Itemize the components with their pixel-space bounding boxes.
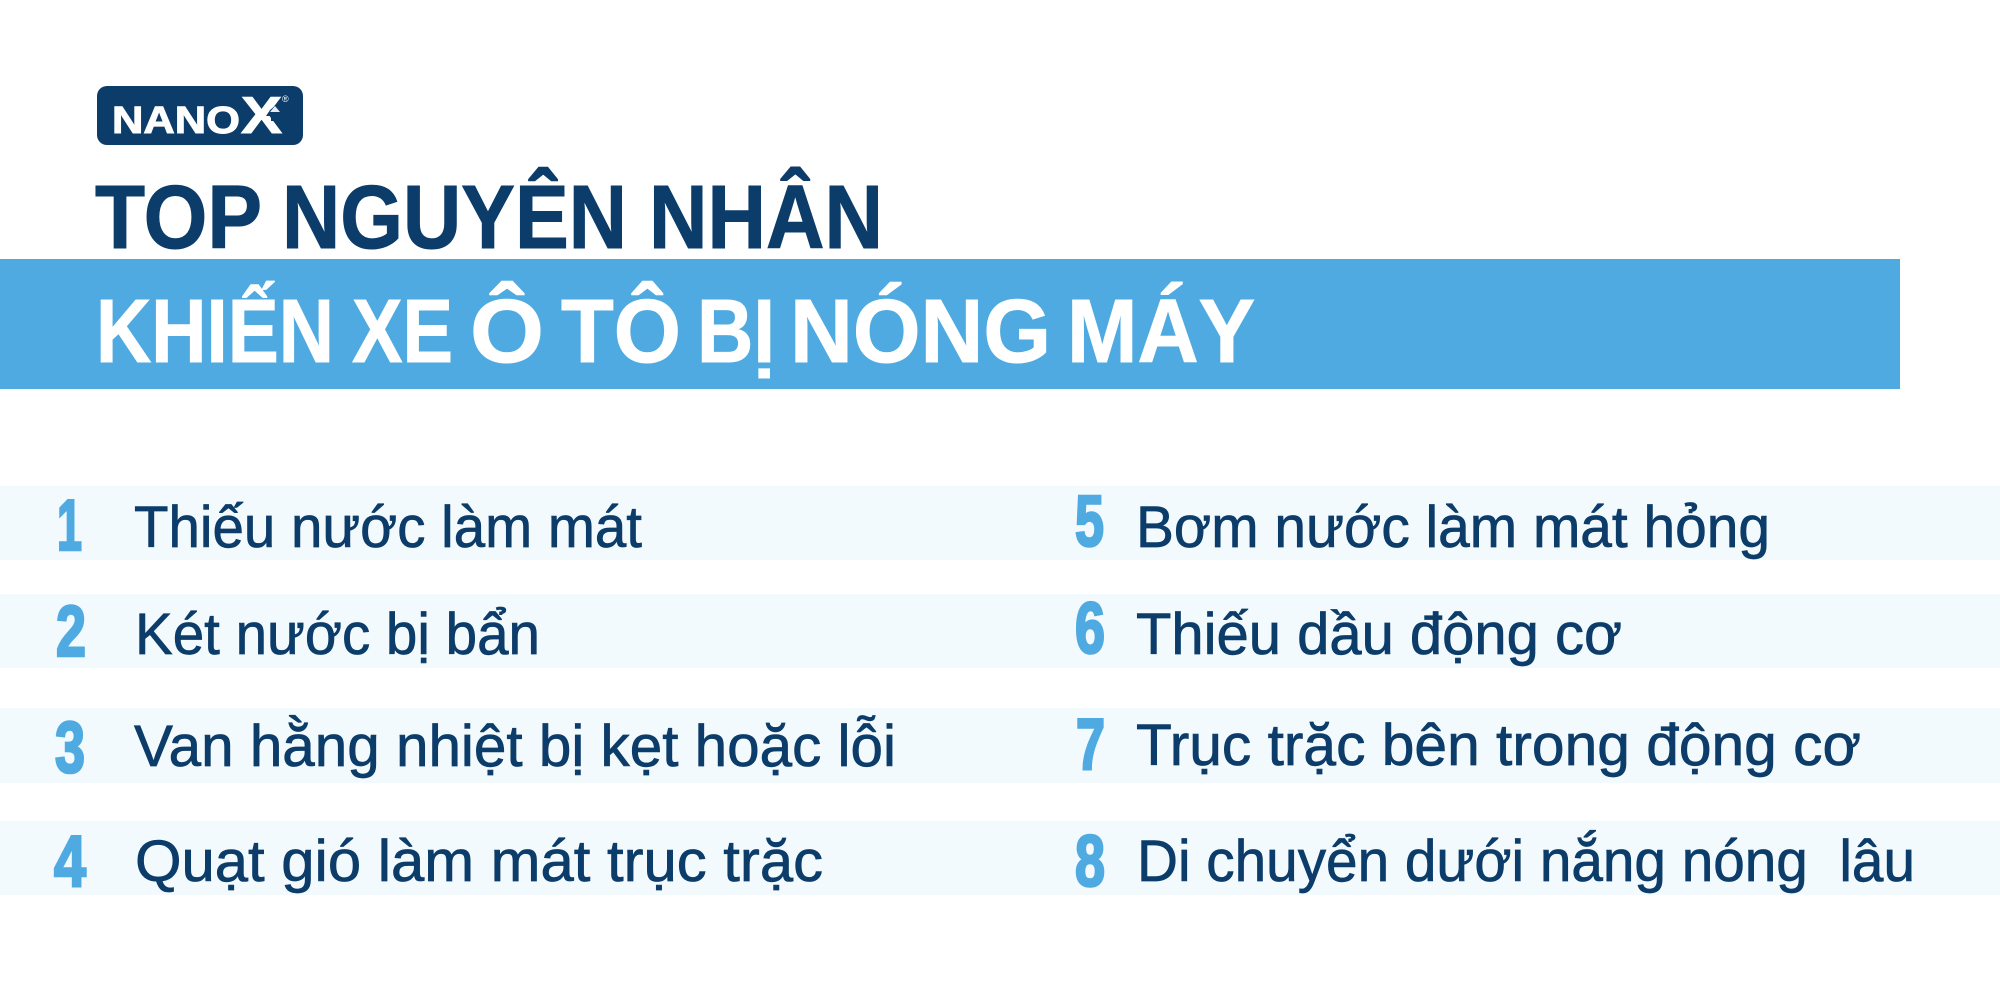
number 3: 3: [55, 708, 85, 788]
label 6: Thiếu dầu động cơ: [1136, 602, 1622, 667]
item 5: [1040, 482, 2000, 562]
number 2: 2: [56, 592, 86, 672]
title: first line: [95, 166, 883, 268]
label 2: Két nước bị bẩn: [135, 602, 540, 667]
label 3: Van hằng nhiệt bị kẹt hoặc lỗi: [134, 714, 896, 779]
title: first line: NGUYÊN: [282, 166, 627, 268]
label 5: Bơm nước làm mát hỏng: [1136, 495, 1770, 560]
title: second line: Ô: [470, 280, 544, 382]
title: second line: KHIẾN: [96, 280, 334, 382]
title: second line: TÔ: [561, 280, 681, 382]
item 1: [0, 486, 2000, 566]
logo: NanoX badge: [97, 86, 303, 145]
item 2: [0, 592, 2000, 672]
title: second line: BỊ: [697, 282, 775, 382]
label 8: Di chuyển dưới nắng nóng lâu: [1137, 829, 1915, 894]
label 4: Quạt gió làm mát trục trặc: [135, 829, 823, 894]
number 1: 1: [57, 486, 82, 566]
label 1: Thiếu nước làm mát: [134, 495, 642, 560]
title: first line: TOP: [95, 168, 262, 268]
item 3: [0, 708, 2000, 788]
number 5: 5: [1075, 482, 1104, 562]
logo: NanoX badge: X: [241, 87, 282, 145]
number 6: 6: [1075, 589, 1105, 669]
item 4: [0, 821, 2000, 902]
title: second line: [96, 280, 1255, 382]
number 8: 8: [1075, 822, 1105, 902]
logo: NanoX badge: NANO: [112, 100, 240, 142]
item 7: [1040, 705, 2000, 785]
title: second line: MÁY: [1067, 281, 1255, 382]
number 4: 4: [54, 822, 86, 902]
item 6: [1040, 589, 2000, 669]
item 8: [1040, 821, 2000, 902]
logo: NanoX badge: ®: [282, 94, 289, 104]
title band: [0, 259, 1900, 389]
label 7: Trục trặc bên trong động cơ: [1136, 713, 1861, 778]
title: first line: NHÂN: [649, 166, 883, 268]
title: second line: NÓNG: [790, 281, 1051, 382]
number 7: 7: [1076, 705, 1105, 785]
title: second line: XE: [352, 282, 453, 382]
